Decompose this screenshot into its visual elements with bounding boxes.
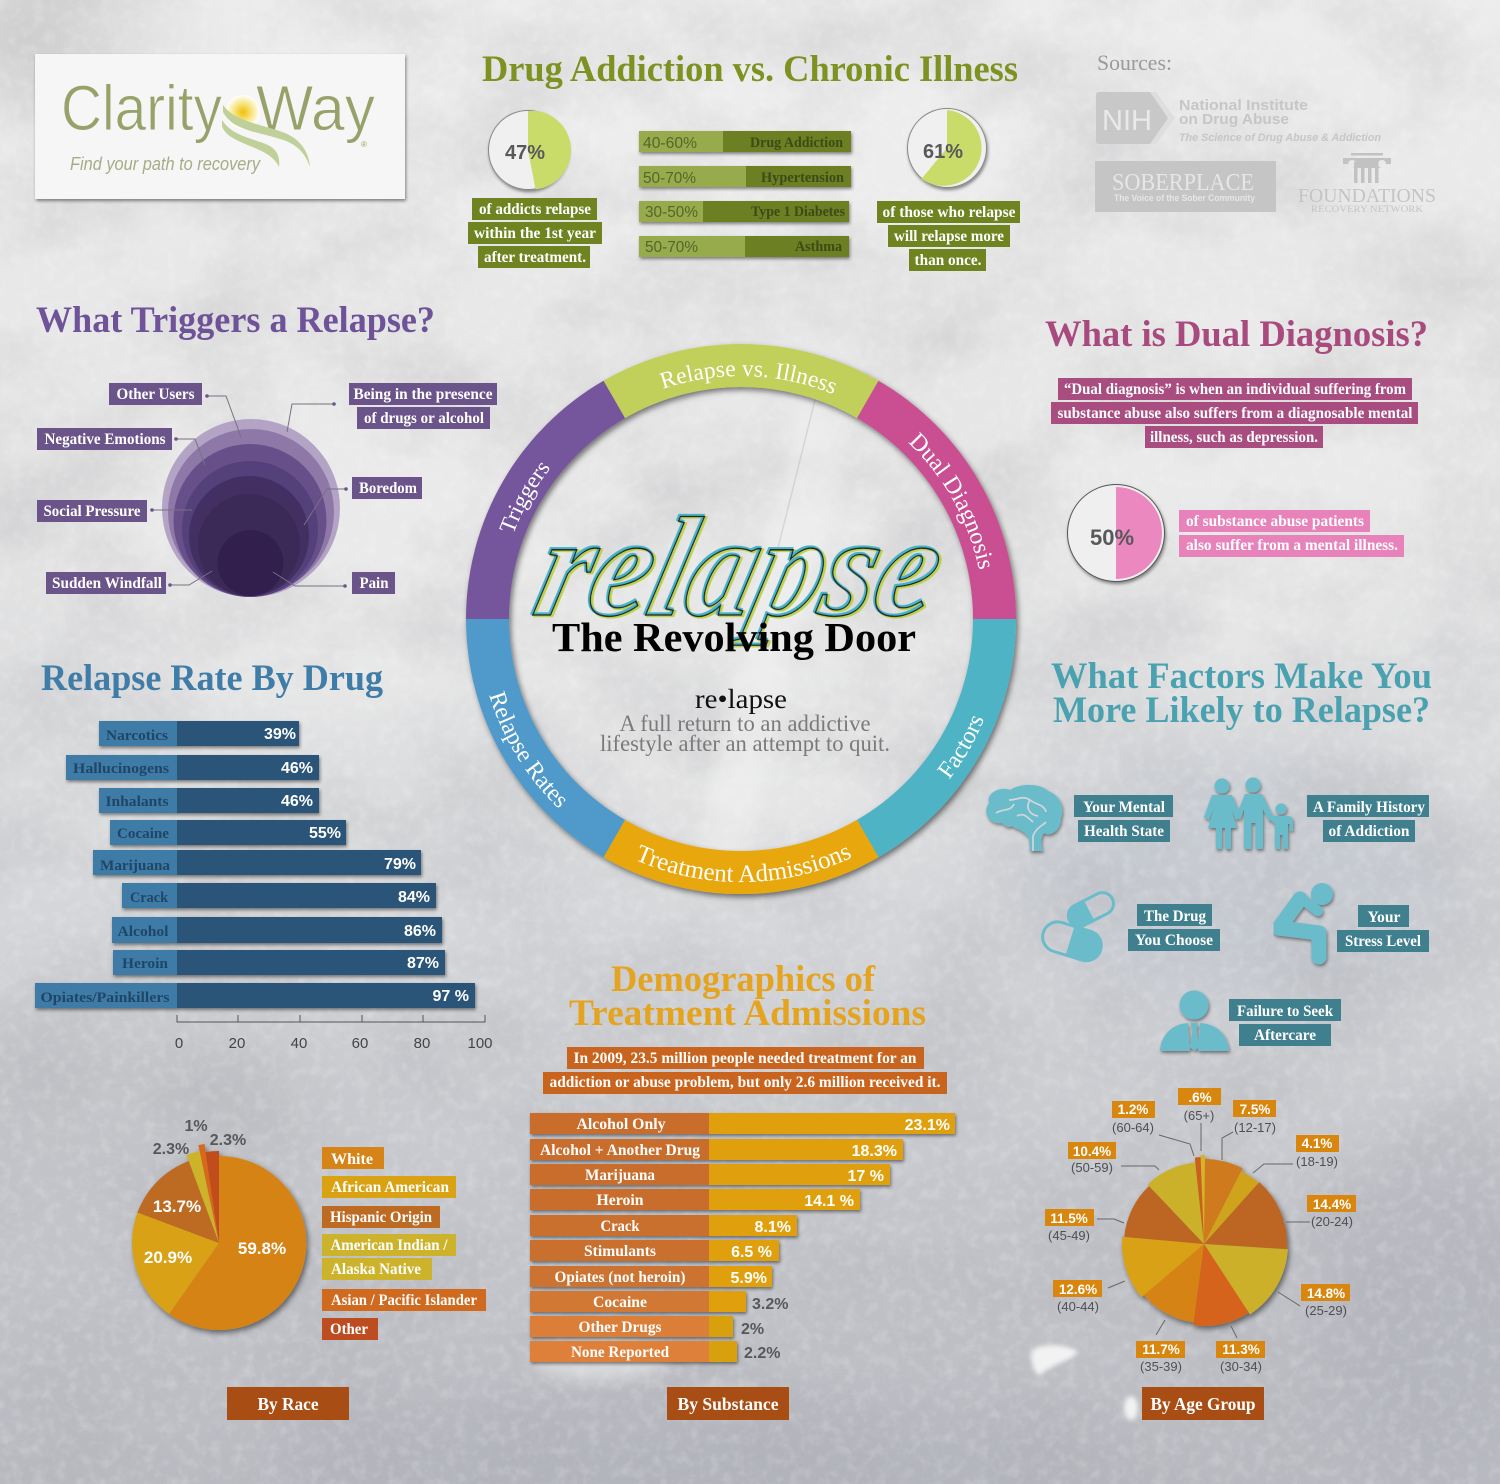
panel: chronic illness comparison bars (639, 131, 851, 257)
caption: By Age Group: By Age Group (1150, 1394, 1256, 1414)
age label: 11.3% 30-34 (1216, 1341, 1265, 1374)
bar: Heroin 14.1%: Heroin (596, 1192, 644, 1209)
pie: 61%: 61% (923, 141, 963, 163)
ring label: Treatment Admissions: Treatment Admissions (638, 844, 851, 882)
logo: Soberplace: The Voice of the Sober Community (1114, 193, 1255, 203)
bar: Marijuana 17%: 17 % (848, 1168, 884, 1185)
axis: 0 (175, 1035, 183, 1052)
subtitle: The Revolving Door: The Revolving Door (552, 614, 916, 660)
bar: Type 1 Diabetes (639, 201, 849, 222)
bar: Crack 84%: 84% (398, 889, 430, 906)
logo: Soberplace: SOBERPLACE (1112, 170, 1254, 196)
label: Your Stress Level (1337, 905, 1429, 952)
axis: 60 (352, 1035, 368, 1052)
bar: Cocaine 55%: Cocaine (117, 826, 169, 842)
age label: 1.2% 60-64: (60-64) (1112, 1120, 1154, 1135)
bar: Other Drugs 2% (530, 1316, 764, 1338)
age label: 14.4% 20-24: (20-24) (1311, 1214, 1353, 1229)
age label: 12.6% 40-44: 12.6% (1059, 1282, 1097, 1297)
label: Failure to Seek Aftercare: Aftercare (1254, 1027, 1316, 1044)
icon: pills (1039, 889, 1117, 964)
heading: Drug Addiction vs. Chronic Illness: Drug Addiction vs. Chronic Illness (482, 49, 1018, 90)
bar: Alcohol Only 23.1% (530, 1113, 955, 1134)
bar: Narcotics 39%: 39% (264, 726, 296, 743)
label: A Family History of Addiction (1307, 795, 1429, 842)
bar: Cocaine 55%: 55% (309, 825, 341, 842)
axis: 80 (414, 1035, 430, 1052)
age label: 12.6% 40-44: (40-44) (1057, 1299, 1099, 1314)
age label: 14.4% 20-24: 14.4% (1313, 1197, 1351, 1212)
bar: Marijuana 79% (93, 850, 421, 875)
age label: 10.4% 50-59: 10.4% (1073, 1144, 1111, 1159)
label: Other Users: Other Users (116, 386, 194, 403)
bar: Type 1 Diabetes: Type 1 Diabetes (751, 204, 845, 220)
icon: person with tie (1160, 990, 1229, 1051)
caption: By Substance (667, 1387, 789, 1420)
age label: 7.5% 12-17: (12-17) (1234, 1120, 1276, 1135)
heading: What Factors Make You More Likely to Relapse?: What Factors Make You (1051, 656, 1432, 697)
navigation ring (464, 343, 1022, 901)
pie: 47%: 47% (505, 142, 545, 164)
bar: None Reported 2.2%: None Reported (571, 1344, 669, 1361)
bar: Opiates (not heroin) 5.9% (530, 1266, 772, 1287)
panel: dual diagnosis (1051, 378, 1418, 582)
legend: race (322, 1147, 486, 1340)
bar: Heroin 87%: 87% (407, 955, 439, 972)
age label: 10.4% 50-59: (50-59) (1071, 1160, 1113, 1175)
heading: What Factors Make You More Likely to Relapse?: More Likely to Relapse? (1053, 690, 1430, 731)
label: A Family History of Addiction: A Family History (1313, 799, 1425, 816)
label: Your Mental Health State (1074, 795, 1173, 842)
callout: treatment gap: In 2009, 23.5 million people needed treatment for an (574, 1050, 917, 1067)
age label: .6% 65+: (65+) (1184, 1108, 1214, 1123)
legend: race: African American (331, 1179, 449, 1196)
bar: Cocaine 3.2%: Cocaine (593, 1294, 647, 1311)
age label: 7.5% 12-17 (1233, 1100, 1276, 1135)
logo: Foundations (1298, 153, 1436, 214)
caption: By Race (227, 1387, 349, 1420)
age label: 11.3% 30-34: 11.3% (1222, 1342, 1260, 1357)
icon: brain (986, 785, 1062, 851)
bar: Hallucinogens 46% (66, 755, 319, 780)
legend: race: White (331, 1151, 373, 1168)
definition text: illness, such as depression. (1150, 429, 1318, 446)
panel: 61% relapse stat (877, 108, 1020, 271)
logo: Foundations: FOUNDATIONS (1298, 185, 1436, 207)
logo: Soberplace (1095, 161, 1276, 212)
bar: Marijuana 17% (530, 1164, 890, 1185)
icon: family (1204, 778, 1293, 849)
ring label: Factors: Factors (936, 716, 984, 780)
logo: NIH: National Institute (1179, 97, 1308, 114)
age label: 11.5% 45-49 (1045, 1209, 1094, 1243)
axis: 100 (467, 1035, 493, 1052)
bar: Inhalants 46%: Inhalants (106, 794, 169, 810)
label: A Family History of Addiction: of Addiction (1328, 823, 1410, 840)
bar: Cocaine 3.2%: 3.2% (752, 1296, 788, 1313)
bar: Drug Addiction (639, 131, 851, 152)
bar: Alcohol Only 23.1%: 23.1% (905, 1117, 950, 1134)
bar: Inhalants 46%: 46% (281, 793, 313, 810)
label: Other Users (109, 383, 202, 405)
bar: Heroin 87% (113, 950, 445, 975)
caption: 47% (468, 198, 602, 268)
bar: Opiates/Painkillers 97% (35, 983, 475, 1008)
label: The Drug You Choose (1128, 904, 1220, 951)
caption: By Substance: By Substance (678, 1394, 779, 1414)
pie: 61% (908, 108, 986, 188)
bar: Cocaine 55% (110, 820, 346, 845)
logo: NIH: on Drug Abuse (1179, 111, 1289, 128)
legend: race: Hispanic Origin (330, 1209, 432, 1226)
logo: Foundations: RECOVERY NETWORK (1311, 204, 1424, 214)
callout: treatment gap (543, 1047, 947, 1094)
age label: .6% 65+ (1178, 1088, 1221, 1123)
bar: Alcohol + Another Drug 18.3%: 18.3% (852, 1143, 897, 1160)
pie: by race: 2.3% (153, 1141, 189, 1158)
label: The Drug You Choose: You Choose (1135, 932, 1213, 949)
panel: relapse triggers (37, 383, 497, 597)
age label: 4.1% 18-19: 4.1% (1302, 1136, 1332, 1151)
bar: Opiates (not heroin) 5.9%: Opiates (not heroin) (554, 1269, 686, 1286)
legend: race: Asian / Pacific Islander (331, 1292, 477, 1309)
definition (600, 684, 890, 756)
caption: 50%: also suffer from a mental illness. (1186, 537, 1398, 554)
definition text: substance abuse also suffers from a diagnosable mental (1058, 405, 1413, 422)
pie: by race: 1% (184, 1118, 208, 1135)
pie: 50%: 50% (1090, 525, 1134, 550)
caption: 47%: within the 1st year (474, 225, 596, 242)
bar: Stimulants 6.5%: 6.5 % (731, 1244, 772, 1261)
bar: Crack 84% (122, 883, 436, 908)
caption: 61% (877, 201, 1020, 271)
label: Being in the presence of drugs or alcohol (349, 383, 497, 429)
label: Your Stress Level: Your (1368, 909, 1401, 926)
panel: Clarity Way logo (35, 54, 405, 199)
caption: 50%: of substance abuse patients (1186, 513, 1364, 530)
callout: treatment gap: addiction or abuse problem, but only 2.6 million received it. (550, 1074, 941, 1091)
age label: 14.4% 20-24 (1307, 1195, 1356, 1229)
bar: Asthma (639, 236, 849, 257)
age label: .6% 65+: .6% (1188, 1090, 1212, 1105)
bar: Alcohol + Another Drug 18.3% (530, 1139, 903, 1160)
pie: 47% (488, 110, 571, 190)
bar: Inhalants 46% (99, 788, 319, 813)
age label: 11.7% 35-39: (35-39) (1140, 1359, 1182, 1374)
caption: By Age Group (1142, 1387, 1264, 1420)
bar: Crack 8.1%: Crack (600, 1218, 640, 1235)
bar: None Reported 2.2%: 2.2% (744, 1345, 780, 1362)
bar: Narcotics 39% (99, 721, 299, 746)
definition text (1051, 378, 1418, 448)
age label: 11.5% 45-49: (45-49) (1048, 1228, 1090, 1243)
label: The Drug You Choose: The Drug (1144, 908, 1206, 925)
bar: Other Drugs 2%: 2% (741, 1321, 764, 1338)
legend: race: American Indian / (330, 1237, 448, 1254)
bar: Heroin 87%: Heroin (122, 956, 169, 972)
definition text: “Dual diagnosis” is when an individual suffering from (1064, 381, 1406, 398)
label: Sudden Windfall: Sudden Windfall (52, 575, 163, 592)
caption: 47%: of addicts relapse (479, 201, 591, 218)
axis: 20 (229, 1035, 245, 1052)
bar: Asthma: Asthma (795, 239, 843, 255)
ring label: Triggers: Triggers (499, 462, 550, 532)
logo tagline: Find your path to recovery (70, 154, 261, 174)
bar: Alcohol 86%: 86% (404, 923, 436, 940)
bar: Marijuana 79%: Marijuana (100, 858, 170, 874)
pie: by race: 59.8% (238, 1239, 286, 1258)
label: Your Mental Health State: Your Mental (1083, 799, 1166, 816)
logo wordmark: Way (256, 72, 375, 144)
logo: NIH: The Science of Drug Abuse & Addiction (1179, 132, 1381, 144)
panel: by age group (1045, 1088, 1356, 1420)
bar: Heroin 14.1% (530, 1189, 860, 1210)
pie leader lines (1097, 1123, 1310, 1338)
bar: Narcotics 39%: Narcotics (106, 728, 168, 744)
panel: 47% relapse stat (468, 110, 602, 268)
bar: Alcohol 86%: Alcohol (118, 924, 168, 940)
age label: 7.5% 12-17: 7.5% (1240, 1102, 1270, 1117)
label: Social Pressure: Social Pressure (44, 503, 141, 520)
bar: Alcohol Only 23.1%: Alcohol Only (576, 1116, 666, 1133)
panel: by race (132, 1118, 486, 1420)
caption: 50% (1179, 510, 1404, 557)
bar: Hypertension (639, 166, 851, 187)
heading: What is Dual Diagnosis?: What is Dual Diagnosis? (1045, 314, 1428, 355)
caption: 61%: of those who relapse (882, 204, 1016, 221)
bar: Cocaine 3.2% (530, 1291, 788, 1313)
chart: admissions by substance (530, 1113, 955, 1362)
logo wordmark (61, 72, 375, 149)
pie: by race (132, 1118, 306, 1330)
bar: Alcohol + Another Drug 18.3%: Alcohol + Another Drug (540, 1142, 700, 1159)
bar: Heroin 14.1%: 14.1 % (804, 1193, 854, 1210)
label: Pain (352, 572, 395, 594)
logo: NIH: NIH (1102, 105, 1152, 137)
bar: Opiates/Painkillers 97%: Opiates/Painkillers (40, 990, 170, 1006)
caption: By Race: By Race (258, 1394, 319, 1414)
bar: Opiates/Painkillers 97%: 97 % (433, 988, 469, 1005)
legend: race: Other (330, 1321, 368, 1338)
sources heading: Sources: (1097, 50, 1172, 75)
label: Negative Emotions: Negative Emotions (44, 431, 166, 448)
bar: Other Drugs 2%: Other Drugs (578, 1319, 662, 1336)
legend: race: Alaska Native (331, 1261, 421, 1278)
logo wordmark: Clarity (61, 72, 222, 144)
heading: What Triggers a Relapse?: What Triggers a Relapse? (36, 300, 435, 341)
bar: Opiates (not heroin) 5.9%: 5.9% (731, 1270, 767, 1287)
icon: stressed person (1279, 883, 1333, 957)
age label: 1.2% 60-64 (1112, 1101, 1155, 1135)
label: Pain: Pain (360, 575, 389, 592)
bar: Hypertension: Hypertension (761, 170, 844, 186)
age label: 10.4% 50-59 (1068, 1142, 1116, 1175)
heading: Demographics of Treatment Admissions: Demographics of (611, 959, 876, 1000)
logo wordmark: ® (361, 140, 367, 149)
title: relapse script: relapse (522, 490, 959, 647)
age label: 12.6% 40-44 (1053, 1280, 1102, 1314)
axis (175, 1015, 493, 1052)
age label: 14.8% 25-29 (1301, 1284, 1350, 1318)
logo icon: sun and path (222, 95, 310, 167)
bar: None Reported 2.2% (530, 1341, 780, 1362)
caption: 47%: after treatment. (484, 249, 586, 266)
pie: 50% (1068, 484, 1164, 582)
pie: by race: 13.7% (153, 1197, 201, 1216)
age label: 11.7% 35-39 (1136, 1341, 1185, 1374)
definition: re•lapse (695, 684, 787, 714)
bar: Asthma: 50-70% (645, 239, 698, 256)
bar: Marijuana 79%: 79% (384, 856, 416, 873)
label: Boredom (352, 477, 422, 499)
bar: Hallucinogens 46%: 46% (281, 760, 313, 777)
label: Being in the presence of drugs or alcohol: of drugs or alcohol (364, 410, 485, 427)
panel: sources (1095, 50, 1436, 214)
bar: Stimulants 6.5%: Stimulants (584, 1243, 656, 1260)
age label: 4.1% 18-19: (18-19) (1296, 1154, 1338, 1169)
label: Failure to Seek Aftercare (1229, 999, 1341, 1046)
definition: A full return to an addictive (620, 711, 870, 736)
pie: by age group (1122, 1155, 1288, 1326)
ring label: Dual Diagnosis: Dual Diagnosis (908, 432, 992, 569)
caption: 61%: will relapse more (894, 228, 1004, 245)
heading: What Factors Make You More Likely to Relapse? (1051, 656, 1432, 731)
bar: Crack 84%: Crack (130, 890, 169, 906)
label: Your Stress Level: Stress Level (1345, 933, 1422, 950)
ring label: Relapse Rates: Relapse Rates (489, 690, 566, 808)
bar: Stimulants 6.5% (530, 1240, 779, 1261)
caption: 61%: than once. (914, 252, 982, 269)
label: Being in the presence of drugs or alcohol: Being in the presence (354, 386, 493, 403)
age label: 11.7% 35-39: 11.7% (1142, 1342, 1180, 1357)
age label: 14.8% 25-29: (25-29) (1305, 1303, 1347, 1318)
bar: Hallucinogens 46%: Hallucinogens (73, 761, 169, 777)
chart: nested circles (162, 419, 340, 597)
logo: NIH (1096, 92, 1381, 144)
axis: 40 (291, 1035, 307, 1052)
bar: Alcohol 86% (112, 917, 442, 943)
bar: Crack 8.1% (530, 1215, 797, 1236)
bar: Marijuana 17%: Marijuana (585, 1167, 655, 1184)
pie: by race: 20.9% (144, 1248, 192, 1267)
age label: 11.3% 30-34: (30-34) (1220, 1359, 1262, 1374)
age label: 4.1% 18-19 (1296, 1135, 1339, 1169)
pie: by race: 2.3% (210, 1132, 246, 1149)
bar: Crack 8.1%: 8.1% (755, 1219, 791, 1236)
label: Your Mental Health State: Health State (1084, 823, 1164, 840)
label: Boredom: Boredom (359, 480, 417, 497)
age label: 11.5% 45-49: 11.5% (1050, 1211, 1088, 1226)
bar: Drug Addiction: Drug Addiction (750, 135, 843, 151)
ring label: Relapse vs. Illness: Relapse vs. Illness (658, 363, 836, 394)
bar: Hypertension: 50-70% (643, 170, 696, 187)
label: Failure to Seek Aftercare: Failure to Seek (1237, 1003, 1333, 1020)
panel: risk factors (986, 778, 1429, 1051)
heading: Demographics of Treatment Admissions (569, 959, 926, 1034)
age label: 1.2% 60-64: 1.2% (1118, 1102, 1148, 1117)
chart: relapse rate by drug (35, 721, 493, 1052)
heading: Demographics of Treatment Admissions: Treatment Admissions (569, 993, 926, 1034)
age label: 14.8% 25-29: 14.8% (1307, 1286, 1345, 1301)
heading: Relapse Rate By Drug: Relapse Rate By Drug (41, 658, 383, 699)
bar: Drug Addiction: 40-60% (643, 135, 697, 152)
bar: Type 1 Diabetes: 30-50% (645, 204, 698, 221)
connector lines with end dots (150, 394, 348, 588)
definition: lifestyle after an attempt to quit. (600, 731, 890, 756)
